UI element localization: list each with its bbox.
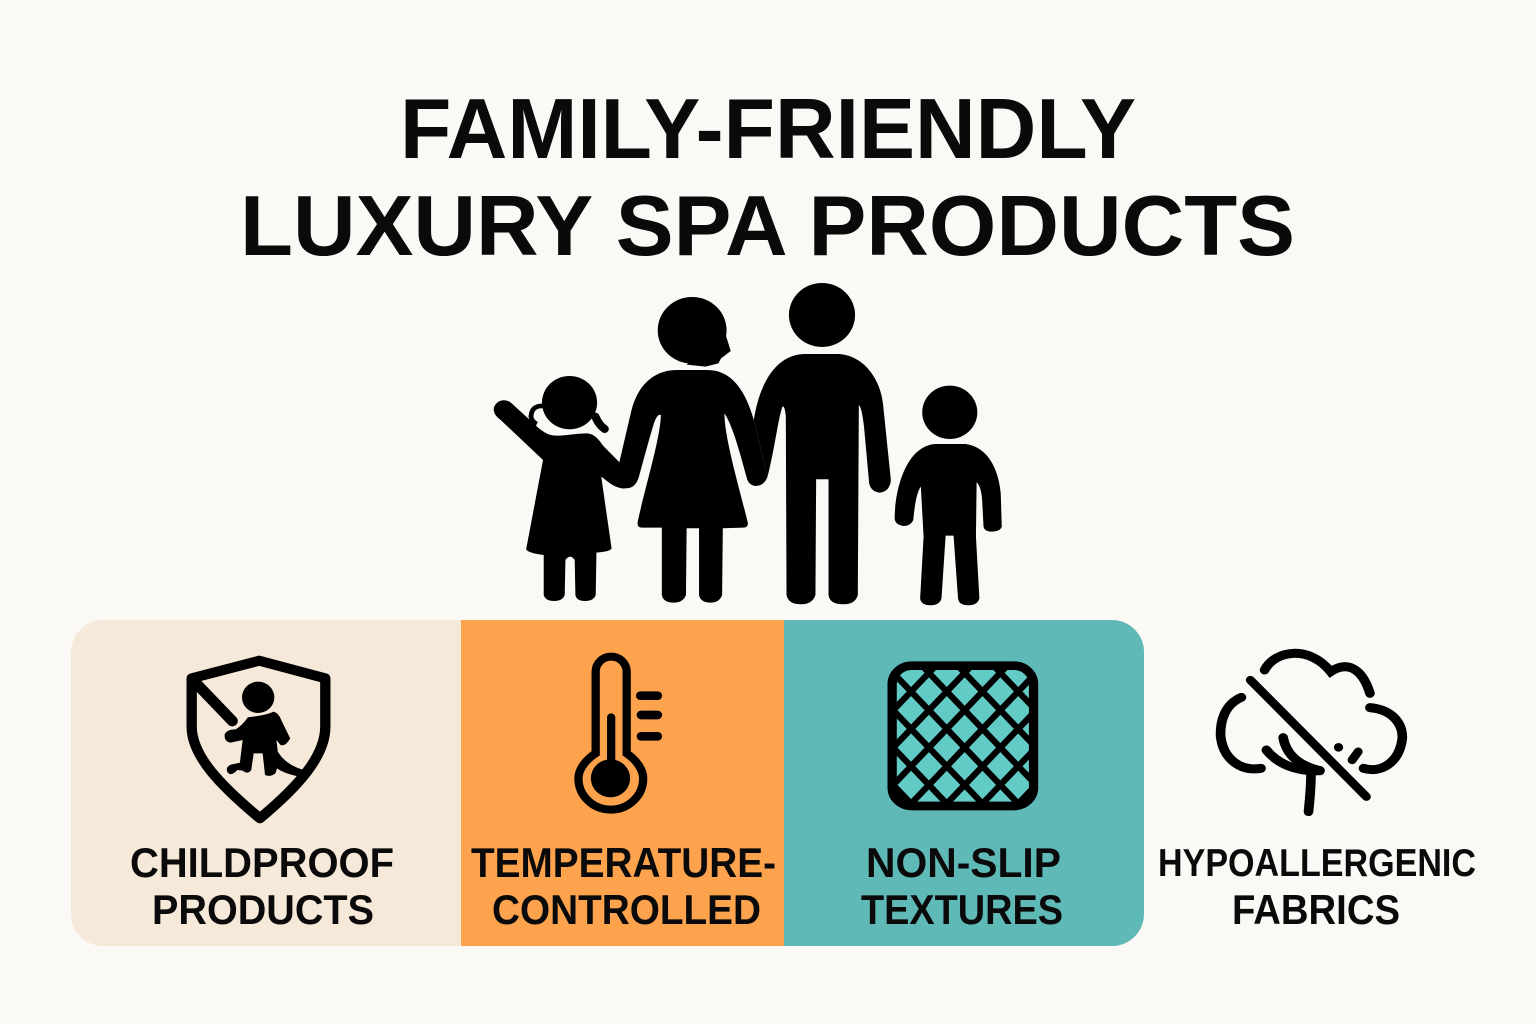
label: non-slip textures: NON-SLIP xyxy=(866,839,1061,886)
icon: family silhouette xyxy=(494,283,1002,605)
title: LUXURY SPA PRODUCTS xyxy=(240,179,1295,274)
title xyxy=(240,82,1295,274)
infographic canvas xyxy=(71,99,1475,946)
girl xyxy=(494,376,637,601)
label: childproof products: CHILDPROOF xyxy=(130,839,394,886)
mother xyxy=(619,297,768,603)
icon: crossed-out cotton xyxy=(1221,653,1402,812)
label: hypoallergenic fabrics xyxy=(1158,842,1476,933)
label: non-slip textures: TEXTURES xyxy=(861,886,1063,933)
father xyxy=(754,283,891,604)
icon: thermometer xyxy=(578,657,658,810)
title: FAMILY-FRIENDLY xyxy=(400,82,1136,177)
boy xyxy=(895,386,1002,605)
icon: non-slip mesh xyxy=(888,661,1038,810)
label: hypoallergenic fabrics: HYPOALLERGENIC xyxy=(1158,842,1476,885)
label: temperature-controlled: TEMPERATURE- xyxy=(471,839,776,886)
panel: non-slip background xyxy=(784,620,1144,946)
label: non-slip textures xyxy=(861,839,1063,933)
label: hypoallergenic fabrics: FABRICS xyxy=(1232,886,1400,933)
panel: childproof background xyxy=(71,620,461,946)
label: temperature-controlled: CONTROLLED xyxy=(492,886,761,933)
label: childproof products xyxy=(130,839,394,933)
icon: shield with child xyxy=(192,661,325,818)
feature band xyxy=(71,620,1144,946)
panel: temperature background xyxy=(461,620,784,946)
label: childproof products: PRODUCTS xyxy=(152,886,374,933)
label: temperature-controlled xyxy=(471,839,776,933)
